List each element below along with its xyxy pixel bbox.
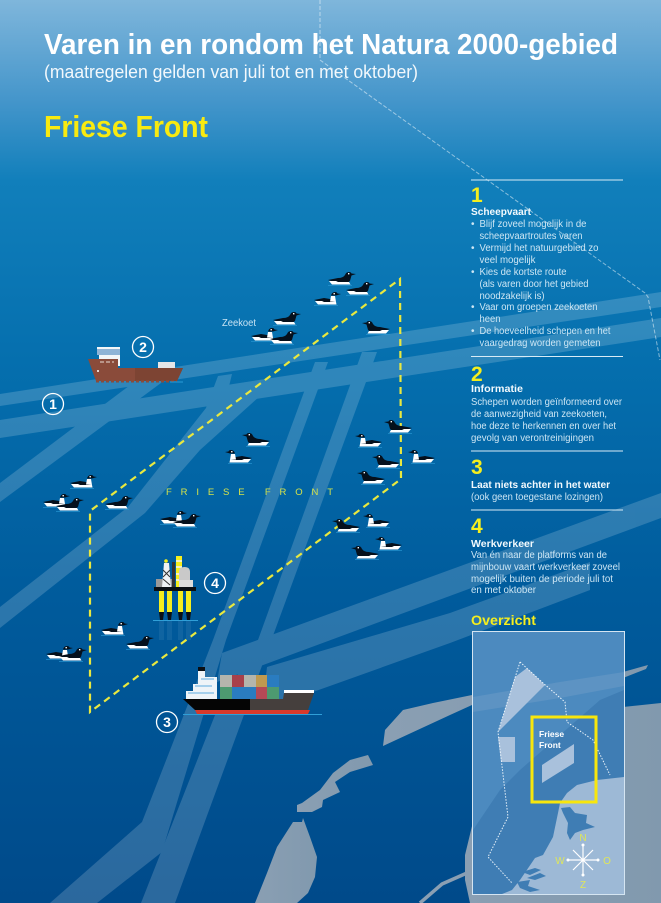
panel: 1 Scheepvaart: Kies de kortste route	[480, 267, 567, 278]
overview: land	[502, 777, 624, 894]
panel: 3 Laat niets achter: (ook geen toegestane lozingen)	[471, 492, 603, 503]
seabirds	[43, 272, 435, 661]
map label: FRIESE FRONT: FRIESE FRONT	[166, 487, 333, 498]
panel: 1 Scheepvaart: 1	[471, 184, 483, 207]
panel: 2 Informatie	[471, 356, 623, 444]
icon: brown work ship	[88, 347, 183, 382]
panel: 1 Scheepvaart: •	[471, 326, 475, 337]
area outline: Friese Front	[90, 279, 401, 712]
panel: 1 Scheepvaart: De hoeveelheid schepen en het	[480, 326, 611, 337]
panel: 2 Informatie: Informatie	[471, 383, 523, 395]
panel: 1 Scheepvaart: scheepvaartroutes varen	[480, 231, 582, 242]
panel: 2 Informatie: 2	[471, 363, 483, 386]
shipping lanes	[0, 292, 661, 903]
panel: 1 Scheepvaart: Scheepvaart	[471, 206, 531, 218]
area heading: Friese Front	[44, 109, 208, 144]
panel: 1 Scheepvaart: Blijf zoveel mogelijk in de	[480, 219, 587, 230]
panel: 1 Scheepvaart: Vaar om groepen zeekoeten	[480, 302, 598, 313]
panel: 1 Scheepvaart: Vermijd het natuurgebied zo	[480, 243, 599, 254]
panel: 4 Werkverkeer: mijnbouw vaart werkverkeer zoveel	[471, 562, 620, 573]
overview: compass rose	[555, 833, 611, 891]
panel: 2 Informatie: gevolg van verontreinigingen	[471, 433, 594, 444]
icon: offshore platform	[153, 556, 198, 640]
overview: Friese Front label	[539, 729, 564, 750]
marker 1	[42, 394, 64, 414]
heading: Overzicht: Overzicht	[471, 612, 536, 628]
title: Varen in en rondom het Natura 2000-gebied	[44, 29, 618, 61]
panel: 1 Scheepvaart: •	[471, 302, 475, 313]
panel: overview map	[472, 632, 624, 894]
marker 3: 3	[163, 714, 171, 730]
marker 4: 4	[211, 575, 219, 591]
marker 3	[156, 712, 178, 732]
panel: 1 Scheepvaart	[471, 180, 623, 349]
panel: 1 Scheepvaart: vaargedrag worden gemeten	[480, 338, 600, 349]
panel: 1 Scheepvaart: •	[471, 219, 475, 230]
panel: 1 Scheepvaart: •	[471, 267, 475, 278]
overview: Friese Front label: Front	[539, 740, 561, 750]
panel: 4 Werkverkeer: en met oktober	[471, 585, 537, 596]
overview: compass rose: W	[555, 856, 565, 867]
panel: 3 Laat niets achter: Laat niets achter in het water	[471, 479, 610, 491]
panel: 1 Scheepvaart: heen	[480, 314, 500, 325]
panel: 3 Laat niets achter: 3	[471, 456, 483, 479]
marker 4	[204, 572, 226, 594]
panel: 2 Informatie: de aanwezigheid van zeekoeten,	[471, 409, 607, 420]
panel: 4 Werkverkeer: Werkverkeer	[471, 538, 534, 550]
map label: Zeekoet: Zeekoet	[222, 318, 256, 329]
overview: dotted boundary	[488, 662, 610, 883]
panel: 3 Laat niets achter	[471, 451, 623, 503]
overview: IJsselmeer	[561, 807, 595, 840]
marker 2	[132, 336, 154, 358]
overview: Friese Front label: Friese	[539, 729, 564, 739]
panel: 2 Informatie: Schepen worden geïnformeerd over	[471, 397, 623, 408]
panel: 1 Scheepvaart: noodzakelijk is)	[480, 291, 544, 302]
overview: delta waters	[517, 868, 546, 892]
boundary: dashed border line	[320, 0, 660, 360]
panel: 4 Werkverkeer: 4	[471, 515, 483, 538]
panel: 4 Werkverkeer: Van én naar de platforms van de	[471, 550, 607, 561]
land: islands and coast	[255, 665, 661, 903]
panel: 4 Werkverkeer: mogelijk buiten de periode juli tot	[471, 574, 613, 585]
overview: protected areas	[498, 668, 574, 783]
overview: compass rose: O	[603, 856, 611, 867]
marker 1: 1	[49, 396, 57, 412]
overview: compass rose: Z	[580, 880, 586, 891]
subtitle: (maatregelen gelden van juli tot en met oktober)	[44, 62, 418, 82]
panel: 1 Scheepvaart: veel mogelijk	[480, 255, 536, 266]
icon: container ship	[183, 667, 322, 714]
panel: 1 Scheepvaart: (als varen door het gebied	[480, 279, 588, 290]
panel: 4 Werkverkeer	[471, 510, 623, 596]
marker 2: 2	[139, 339, 147, 355]
overview: Friese Front frame	[532, 717, 596, 802]
panel: 2 Informatie: hoe deze te herkennen en over het	[471, 421, 616, 432]
overview: compass rose: N	[579, 833, 587, 844]
panel: 1 Scheepvaart: •	[471, 243, 475, 254]
